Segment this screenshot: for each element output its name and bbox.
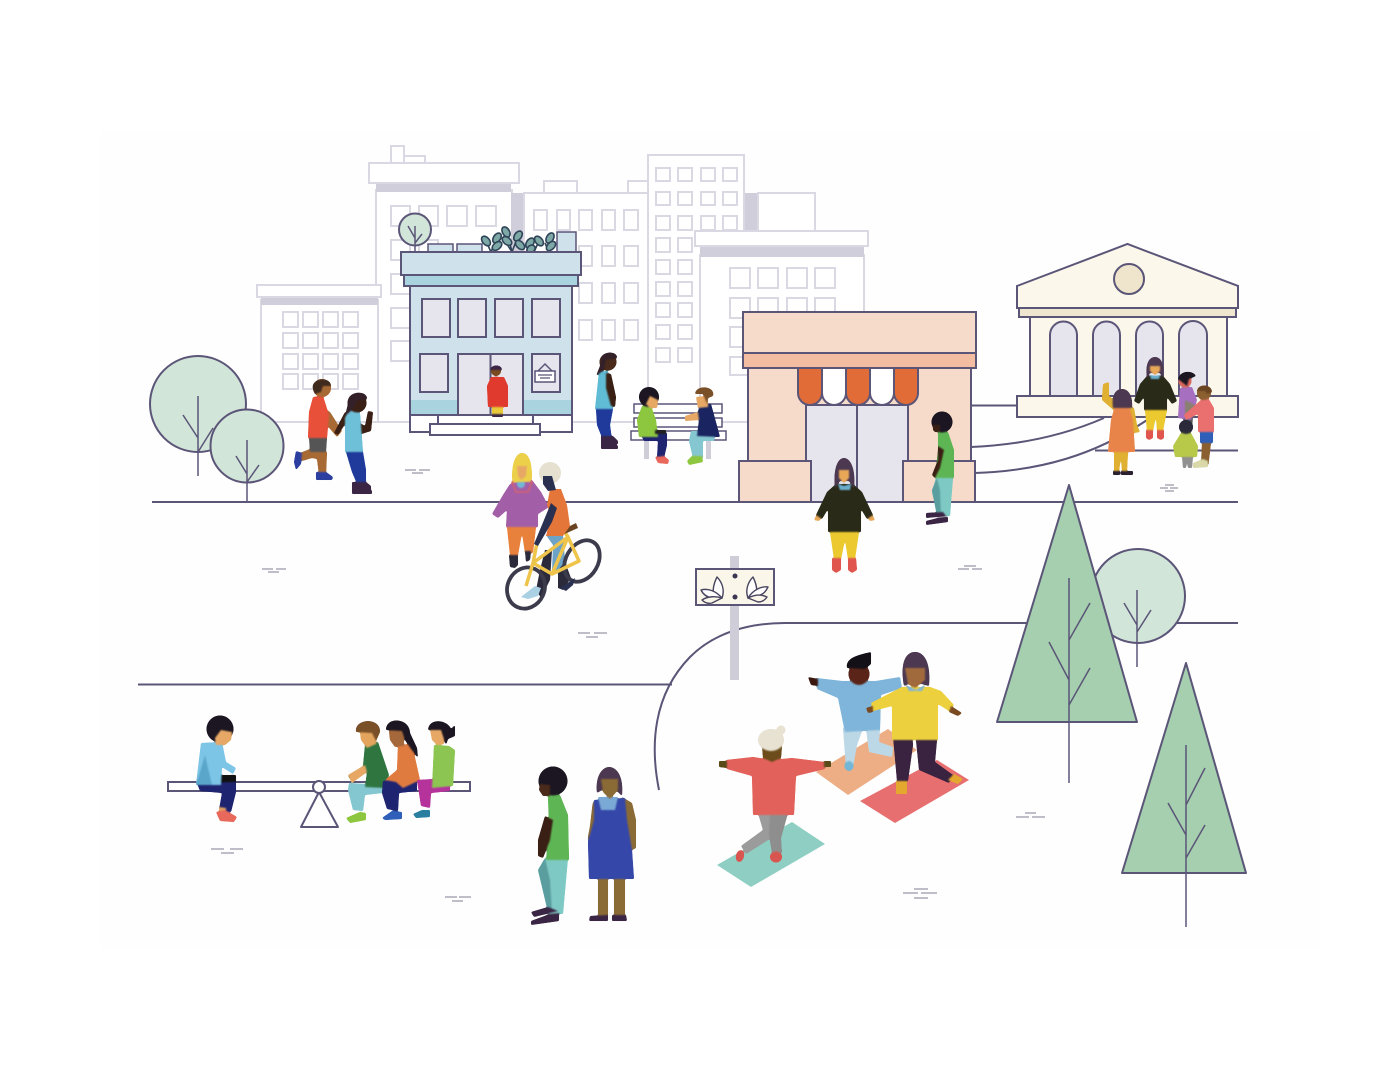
child: lime hoodie [637,387,669,464]
building: shop with awning [739,312,976,502]
child in purple [1178,372,1197,430]
tree: small round left [210,410,284,502]
awning [798,368,918,405]
person: woman in red yoga pose [719,726,831,863]
person: woman in purple with orange trousers [492,453,549,568]
grass marks [211,470,1178,901]
yoga mat: teal [717,822,825,887]
building: rear right of tower [695,231,868,422]
tree: round right [1091,549,1185,667]
building: blue community centre [399,214,581,435]
building: low left [257,285,381,422]
building: tall rear left [369,146,519,422]
person: child in green on seesaw [346,721,389,823]
building: tower [648,155,815,422]
child: navy shirt [685,387,720,465]
yoga mat: peach [816,729,917,795]
woman in black sweater [1134,357,1177,440]
person: man in red shirt [294,379,342,480]
icon: left leaves [701,577,723,603]
background city buildings [257,146,868,422]
yoga mat: red [860,760,969,823]
group of people at civic hall [1102,357,1214,475]
road and path lines [138,406,1238,790]
person: child in teal shirt [334,393,373,494]
tree: large round left [150,356,246,476]
person: woman in blue top near bench [595,353,618,449]
woman in orange dress waving [1102,382,1140,475]
icon: hanging sign [535,364,555,382]
child in red shirt [1184,385,1214,468]
person: boy standing front [531,766,569,925]
person: man in blue yoga pose [808,652,902,771]
building: middle rear [511,181,648,422]
person: woman in black sweater by shop [814,458,875,573]
person: woman in red dress in doorway [487,366,508,417]
person: child in lime on seesaw [413,721,455,818]
icon: right leaves [747,577,768,602]
bicycle [500,523,607,615]
person: cyclist with yellow bike [500,462,607,615]
icon: rooftop plants [480,225,557,255]
small child in lime [1173,420,1198,468]
icon: rooftop tree [399,214,431,252]
tree: front triangle [1122,663,1246,927]
building: civic hall with pediment [1017,244,1238,417]
bench with two children [631,387,726,465]
person: boy in green shirt by shop [926,412,954,525]
tree: tall triangle [997,485,1137,783]
person: woman in yellow yoga pose [866,652,963,794]
signpost with leaves [696,556,774,680]
person: woman in blue dress [587,767,636,921]
person: child in orange on seesaw [382,721,420,820]
seesaw [168,781,470,827]
person: child on left of seesaw [196,716,237,822]
